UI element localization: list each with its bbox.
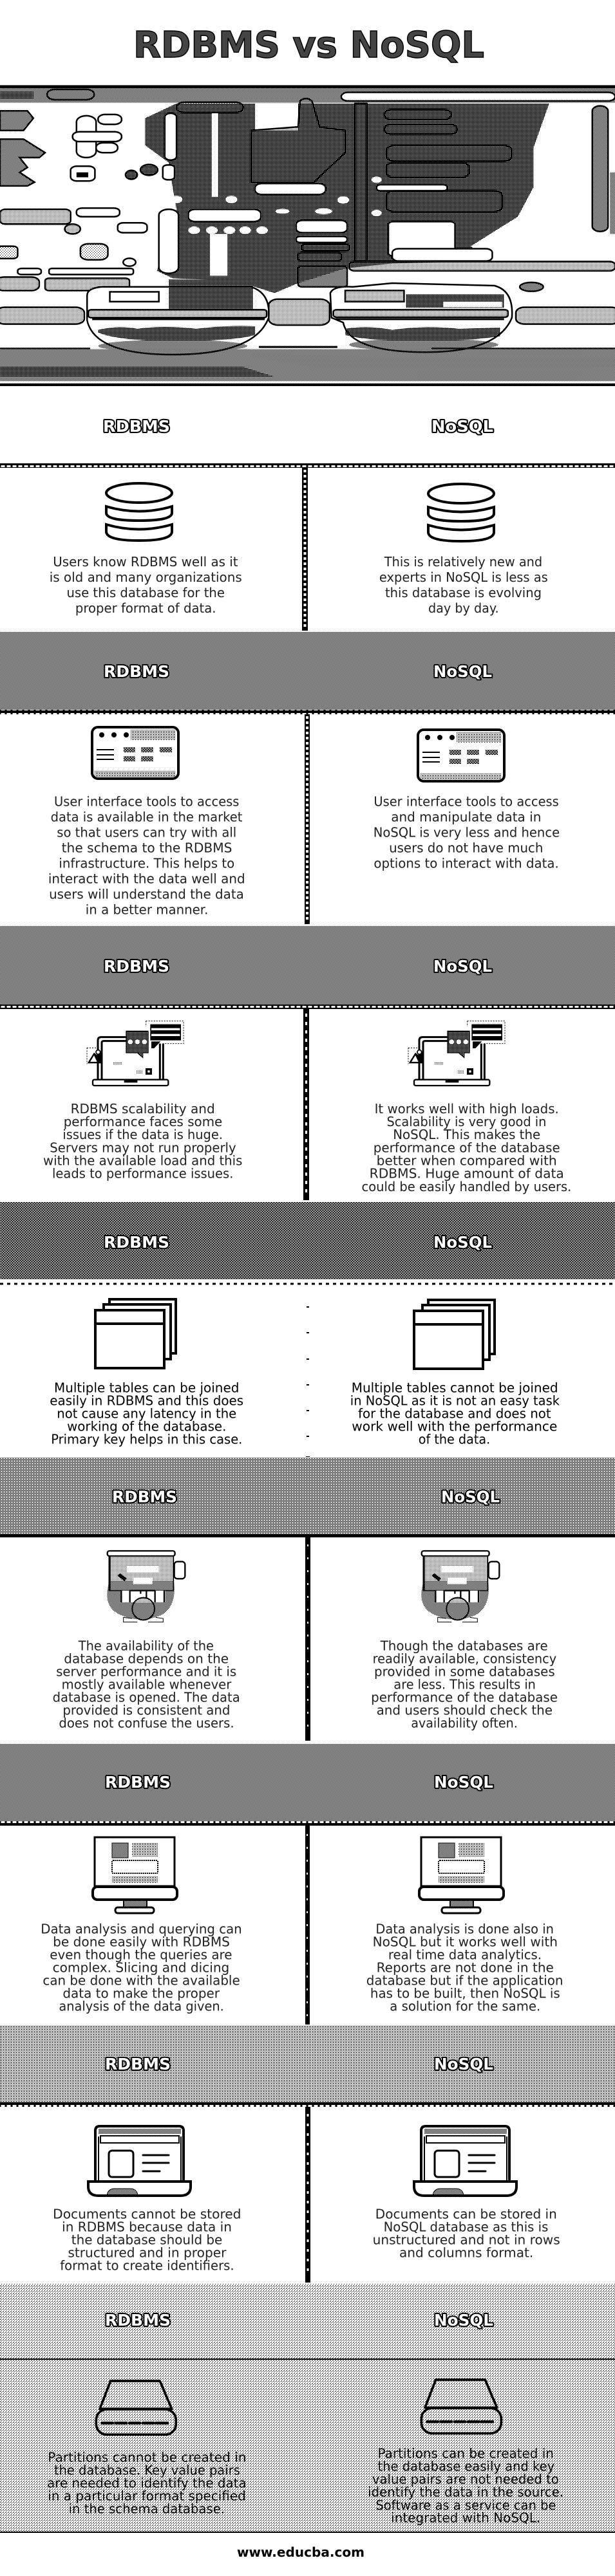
text: right: and columns format.: [399, 2245, 533, 2260]
text: right: [366, 1922, 563, 2014]
text: right: provided in some databases: [374, 1664, 555, 1680]
text: right: performance of the database: [374, 1140, 560, 1156]
text: right: integrated with NoSQL.: [391, 2510, 540, 2525]
text: right: better when compared with: [377, 1153, 557, 1169]
icon: laptop chat right: [408, 1021, 505, 1086]
text: left: even though the queries are: [50, 1947, 232, 1963]
text: right: unstructured and not in rows: [373, 2232, 560, 2247]
heading: NoSQL: NoSQL: [433, 662, 492, 681]
heading: RDBMS: RDBMS: [104, 662, 169, 681]
text: right: [373, 2206, 560, 2260]
text: left: [48, 794, 245, 918]
text: right: could be easily handled by users.: [362, 1179, 571, 1194]
text: left: proper format of data.: [75, 600, 216, 616]
text: right: database but if the application: [366, 1973, 563, 1988]
heading: NoSQL: NoSQL: [434, 1773, 493, 1792]
text: right: identify the data in the source.: [368, 2484, 563, 2499]
text: right: Scalability is very good in: [386, 1114, 546, 1129]
text: left: leads to performance issues.: [52, 1166, 233, 1181]
section 5: [0, 1458, 615, 1741]
heading: NoSQL: NoSQL: [434, 2055, 493, 2073]
text: right: day by day.: [428, 600, 499, 616]
text: right: [374, 794, 560, 871]
text: left: database depends on the: [64, 1651, 229, 1667]
heading: RDBMS: RDBMS: [104, 957, 169, 976]
heading: RDBMS: RDBMS: [105, 2055, 171, 2073]
icon: laptop chat left: [87, 1021, 184, 1086]
heading: NoSQL: NoSQL: [431, 417, 493, 436]
text: left: complex. Slicing and dicing: [53, 1960, 229, 1976]
text: left: format to create identifiers.: [60, 2257, 234, 2273]
text: left: server performance and it is: [56, 1664, 236, 1680]
text: left: can be done with the available: [43, 1973, 240, 1988]
text: left: easily in RDBMS and this does: [50, 1393, 243, 1408]
text: right: this database is evolving: [385, 585, 542, 600]
text: left: Multiple tables can be joined: [54, 1380, 239, 1395]
title: RDBMS vs NoSQL: [133, 24, 484, 66]
text: right: readily available, consistency: [373, 1651, 556, 1667]
text: right: users do not have much: [389, 840, 543, 856]
text: left: Partitions cannot be created in: [48, 2449, 247, 2465]
text: right: work well with the performance: [352, 1418, 557, 1434]
text: left: [43, 1101, 242, 1181]
text: left: in a particular format specified: [48, 2488, 246, 2503]
text: left: [50, 1380, 243, 1447]
section 7: [0, 2026, 615, 2283]
icon: availability user left: [107, 1551, 185, 1622]
text: left: the schema to the RDBMS: [62, 840, 232, 856]
text: left: Documents cannot be stored: [53, 2206, 241, 2221]
icon: stacked tables right: [414, 1300, 495, 1369]
text: right: Multiple tables cannot be joined: [352, 1380, 558, 1395]
text: right: NoSQL but it works well with: [373, 1934, 558, 1950]
icon: laptop document right: [414, 2126, 516, 2196]
section 4: [0, 1202, 615, 1457]
text: right: NoSQL database as this is: [384, 2219, 548, 2234]
text: left: The availability of the: [78, 1638, 214, 1654]
text: right: in NoSQL as it is not an easy task: [350, 1393, 560, 1408]
text: right: and manipulate data in: [391, 810, 541, 825]
text: left: performance faces some: [64, 1114, 222, 1129]
footer: website: www.educba.com: [237, 2544, 364, 2560]
section 3: [0, 926, 615, 1200]
text: right: Partitions can be created in: [377, 2445, 554, 2461]
text: right: are less. This results in: [393, 1677, 536, 1692]
text: right: [368, 2445, 563, 2525]
heading: RDBMS: RDBMS: [105, 2311, 171, 2330]
text: left: structured and in proper: [68, 2245, 227, 2260]
text: right: options to interact with data.: [374, 856, 559, 871]
text: right: Reports are not done in the: [377, 1960, 554, 1976]
icon: monitor left: [93, 1837, 177, 1913]
icon: app window left: [92, 727, 178, 779]
text: left: the database. Key value pairs: [54, 2462, 240, 2478]
icon: database left: [106, 483, 172, 541]
icon: disk drive left: [96, 2381, 176, 2434]
heading: RDBMS: RDBMS: [112, 1488, 177, 1506]
text: left: analysis of the data given.: [59, 1999, 224, 2014]
icon: laptop document left: [88, 2126, 191, 2196]
text: left: [53, 1638, 240, 1731]
text: left: Servers may not run properly: [50, 1140, 236, 1156]
text: left: User interface tools to access: [54, 794, 239, 810]
text: right: [362, 1101, 571, 1194]
text: left: mostly available whenever: [62, 1677, 232, 1692]
heading: RDBMS: RDBMS: [104, 1233, 169, 1252]
text: left: [50, 554, 242, 616]
text: left: Primary key helps in this case.: [51, 1431, 242, 1447]
text: right: has to be built, then NoSQL is: [370, 1986, 560, 2001]
text: left: provided is consistent and: [62, 1703, 230, 1718]
text: right: of the data.: [419, 1431, 490, 1447]
heading: RDBMS: RDBMS: [105, 1773, 171, 1792]
text: left: issues if the data is huge.: [62, 1127, 223, 1142]
section 6: [0, 1744, 615, 2025]
text: left: infrastructure. This helps to: [59, 856, 234, 871]
heading: NoSQL: NoSQL: [433, 957, 492, 976]
text: left: in RDBMS because data in: [62, 2219, 232, 2234]
text: left: data to make the proper: [62, 1986, 220, 2001]
heading: RDBMS: RDBMS: [103, 417, 170, 436]
text: left: with the available load and this: [43, 1153, 242, 1169]
text: left: be done easily with RDBMS: [53, 1934, 230, 1950]
text: left: use this database for the: [67, 585, 225, 600]
text: right: real time data analytics.: [388, 1947, 542, 1963]
section 1: [0, 417, 615, 631]
text: left: RDBMS scalability and: [71, 1101, 215, 1117]
text: right: NoSQL. This makes the: [393, 1127, 540, 1142]
text: right: Data analysis is done also in: [375, 1922, 554, 1937]
text: right: performance of the database: [371, 1690, 558, 1705]
text: left: does not confuse the users.: [59, 1716, 234, 1731]
heading: NoSQL: NoSQL: [441, 1488, 500, 1506]
text: left: Data analysis and querying can: [41, 1922, 242, 1937]
text: right: User interface tools to access: [374, 794, 559, 810]
text: left: interact with the data well and: [48, 871, 245, 887]
heading: NoSQL: NoSQL: [434, 2311, 493, 2330]
text: left: Users know RDBMS well as it: [53, 554, 238, 570]
text: left: [53, 2206, 241, 2273]
text: left: database is opened. The data: [53, 1690, 240, 1705]
text: left: in the schema database.: [69, 2501, 225, 2516]
text: right: for the database and does not: [358, 1405, 551, 1421]
photo: circuit board: [0, 85, 615, 386]
text: left: are needed to identify the data: [47, 2475, 246, 2490]
icon: stacked tables left: [95, 1299, 176, 1368]
text: left: [47, 2449, 246, 2516]
text: left: is old and many organizations: [50, 570, 242, 585]
section 2: [0, 632, 615, 924]
heading: NoSQL: NoSQL: [433, 1233, 492, 1252]
text: left: so that users can try with all: [57, 825, 236, 840]
section 8: [0, 2284, 615, 2533]
text: left: data is available in the market: [51, 810, 243, 825]
icon: disk drive right: [421, 2380, 501, 2433]
text: right: and users should check the: [377, 1703, 553, 1718]
icon: database right: [428, 484, 494, 541]
text: right: Software as a service can be: [375, 2497, 556, 2513]
text: left: users will understand the data: [49, 887, 244, 902]
text: right: experts in NoSQL is less as: [379, 570, 548, 585]
text: right: It works well with high loads.: [375, 1101, 559, 1117]
text: right: value pairs are not needed to: [372, 2471, 559, 2487]
text: right: Documents can be stored in: [375, 2206, 557, 2221]
text: right: NoSQL is very less and hence: [374, 825, 560, 840]
text: left: not cause any latency in the: [57, 1405, 236, 1421]
text: right: Though the databases are: [380, 1638, 548, 1654]
icon: app window right: [418, 730, 504, 781]
text: left: working of the database.: [67, 1418, 226, 1434]
text: right: [350, 1380, 560, 1447]
text: right: [371, 1638, 558, 1731]
text: right: RDBMS. Huge amount of data: [370, 1166, 564, 1181]
icon: availability user right: [421, 1551, 499, 1622]
text: left: [41, 1922, 242, 2014]
text: left: the database should be: [71, 2232, 222, 2247]
text: right: [379, 554, 548, 616]
text: right: This is relatively new and: [384, 554, 542, 570]
text: left: in a better manner.: [86, 902, 208, 918]
text: right: availability often.: [411, 1716, 518, 1731]
text: right: the database easily and key: [377, 2458, 554, 2474]
text: right: a solution for the same.: [390, 1999, 540, 2014]
icon: monitor right: [419, 1837, 504, 1913]
